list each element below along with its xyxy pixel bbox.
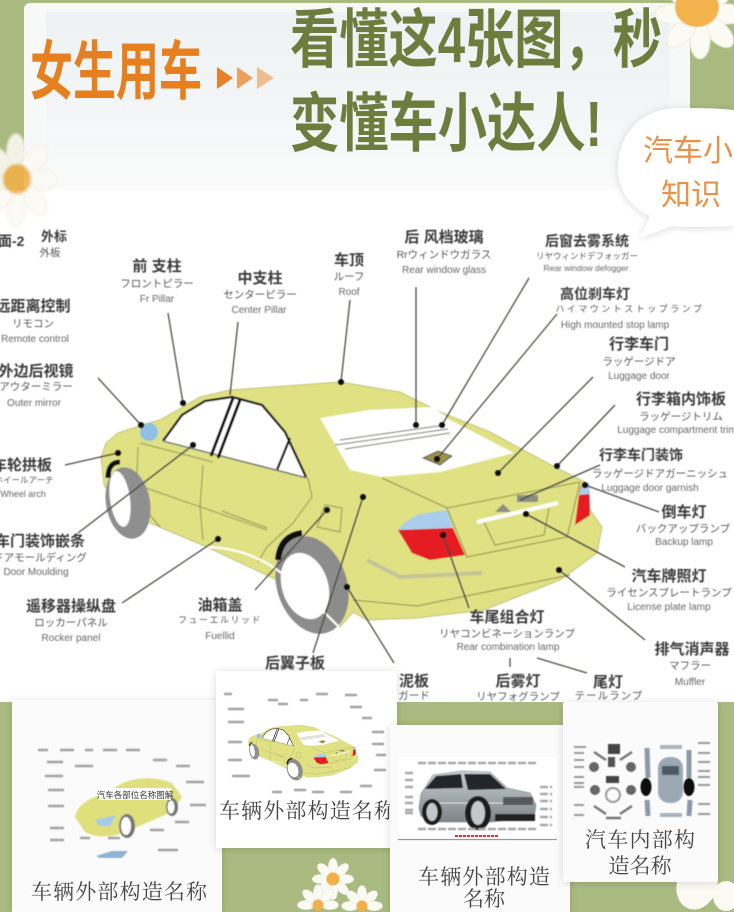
decorative flower top right [655, 0, 734, 59]
label: license plate lamp [606, 567, 732, 613]
callout text [643, 135, 733, 212]
car illustration [100, 382, 602, 643]
label: license plate lamp: 汽车牌照灯 [631, 567, 707, 585]
label: rear fog lamp [476, 673, 560, 703]
label: backup lamp [636, 503, 731, 548]
label: front pillar [120, 257, 194, 305]
caption: 车辆外部构造名称 [31, 880, 208, 904]
label: rear window glass: 后 风档玻璃 [404, 228, 484, 246]
label: roof [334, 251, 364, 298]
label: luggage door [602, 335, 676, 382]
mini title strip: 汽车各部位名称图解 [97, 790, 174, 800]
label: roof: ルーフ [334, 271, 364, 283]
caption: 名称 [463, 887, 506, 911]
label: rear combination lamp [439, 608, 575, 653]
label: remote control: リモコン [12, 318, 54, 330]
label: rear combination lamp: リヤコンビネーションランプ [439, 628, 575, 640]
label: muffler: 排气消声器 [654, 640, 730, 658]
label: rear combination lamp: Rear combination lamp [457, 642, 560, 653]
label: luggage door garnish: Luggage door garnish [601, 483, 699, 494]
label: tail lamp: 尾灯 [593, 674, 623, 691]
label: outer panel: 外板 [40, 246, 61, 259]
label: muffler: マフラー [669, 660, 711, 672]
label: remote control: Remote control [1, 334, 69, 345]
label: backup lamp: バックアップランプ [636, 523, 731, 535]
panel: card 3 [390, 725, 570, 912]
caption: 车辆外部构造名称 [219, 799, 396, 823]
label: rocker panel [26, 597, 116, 644]
mini car [75, 778, 182, 858]
label: rear window defogger: Rear window defogger [543, 263, 629, 273]
decorative flower left [0, 134, 58, 226]
label: roof: 车顶 [334, 251, 364, 269]
label: outer panel: 外标 [41, 229, 67, 244]
label: mudguard: ガード [398, 690, 430, 702]
leader lines [65, 278, 659, 673]
label: outer mirror: Outer mirror [7, 398, 62, 409]
label: outer panel [0, 229, 67, 259]
panel: car diagram sheet [0, 190, 734, 702]
label: rear window glass: Rrウィンドウガラス [397, 249, 491, 261]
caption [418, 865, 550, 911]
label: outer mirror: アウターミラー [0, 381, 73, 393]
label: rocker panel: ロッカーパネル [34, 617, 108, 629]
label: outer mirror: 外边后视镜 [0, 362, 74, 380]
label: wheel arch [0, 456, 54, 499]
part labels [0, 228, 734, 703]
title line two: 变懂车小达人! [290, 88, 602, 160]
icon: three arrows [217, 67, 274, 89]
label: muffler [654, 640, 730, 688]
label: fuel lid: フューエルリッド [178, 615, 262, 625]
label: rear fog lamp: リヤフォグランプ [476, 690, 560, 703]
label: backup lamp: 倒车灯 [661, 503, 707, 521]
label: luggage compartment trim: Luggage compartment trim [617, 425, 734, 436]
label: tail lamp: テールランプ [575, 690, 643, 702]
label: high mounted stop lamp [555, 286, 705, 331]
callout text: 知识 [661, 179, 721, 212]
label: luggage door: 行李车门 [609, 335, 669, 353]
label: tail lamp [575, 674, 643, 702]
label: rear fog lamp: 后雾灯 [495, 673, 541, 690]
label: luggage door garnish: 行李车门装饰 [599, 447, 683, 463]
decorative flowers bottom [297, 855, 734, 912]
label: luggage door: Luggage door [608, 371, 671, 382]
caption: 汽车内部构 [585, 828, 695, 852]
panel: card 2 [216, 671, 397, 848]
mini labels [405, 763, 552, 829]
label: luggage door garnish [592, 447, 728, 494]
label: fuel lid: Fuellid [205, 631, 235, 642]
label: luggage compartment trim: ラッゲージトリム [639, 411, 723, 423]
panel: card 4 [563, 702, 718, 882]
label: luggage compartment trim [617, 390, 734, 436]
label: luggage door garnish: ラッゲージドアガーニッシュ [592, 468, 728, 480]
label: mudguard [398, 672, 430, 702]
label: rear window defogger: 后窗去雾系统 [545, 233, 629, 249]
panel: header frame [24, 3, 690, 193]
label: luggage door: ラッゲージドア [602, 356, 676, 368]
label: rear combination lamp: 车尾组合灯 [469, 608, 545, 626]
label: mudguard: 泥板 [399, 672, 429, 690]
label: fuel lid [178, 596, 262, 642]
mini labels [38, 750, 206, 850]
caption: 造名称 [608, 854, 672, 878]
label: front pillar: Fr Pillar [140, 294, 175, 305]
label: rocker panel: 遥移器操纵盘 [26, 597, 116, 615]
interior parts diagram [574, 743, 710, 818]
label: license plate lamp: ライセンスプレートランプ [606, 587, 732, 599]
callout text: 汽车小 [643, 135, 733, 168]
label: center pillar: Center Pillar [231, 305, 287, 316]
label: door moulding [0, 532, 87, 578]
label: center pillar: センターピラー [223, 289, 297, 301]
label: license plate lamp: License plate lamp [627, 602, 711, 613]
label: front pillar: フロントピラー [120, 278, 194, 290]
label: fuel lid: 油箱盖 [197, 596, 243, 614]
label: outer mirror [0, 362, 74, 409]
label: high mounted stop lamp: High mounted stop lamp [561, 320, 670, 331]
label: roof: Roof [338, 287, 360, 298]
label: backup lamp: Backup lamp [655, 537, 713, 548]
caption [585, 828, 695, 878]
label: luggage compartment trim: 行李箱内饰板 [636, 390, 726, 408]
SUV illustration [419, 771, 536, 830]
label: rear window glass: Rear window glass [402, 265, 486, 276]
label: high mounted stop lamp: 高位刹车灯 [560, 286, 630, 302]
label: wheel arch: Wheel arch [0, 489, 46, 499]
label: muffler: Muffler [675, 677, 706, 688]
label: rear window glass [397, 228, 491, 276]
label: front pillar: 前 支柱 [132, 257, 182, 275]
label: high mounted stop lamp: ハイマウントストップランプ [555, 304, 705, 314]
label: rear window defogger: リヤウィンドデフォッガー [536, 251, 638, 261]
callout bubble [618, 108, 734, 238]
label: center pillar [223, 269, 297, 316]
label: rocker panel: Rocker panel [42, 633, 100, 644]
label: quarter panel: 后翼子板 [265, 654, 325, 672]
label: rear window defogger [536, 233, 638, 273]
panel: card 1 [12, 700, 222, 912]
label: center pillar: 中支柱 [237, 269, 283, 287]
label: door moulding: Door Moulding [3, 567, 69, 578]
title: orange tag: 女生用车 [30, 36, 202, 108]
mini car [248, 725, 358, 783]
caption: 车辆外部构造 [418, 865, 550, 889]
mini labels [224, 694, 386, 792]
label: remote control [0, 297, 71, 345]
